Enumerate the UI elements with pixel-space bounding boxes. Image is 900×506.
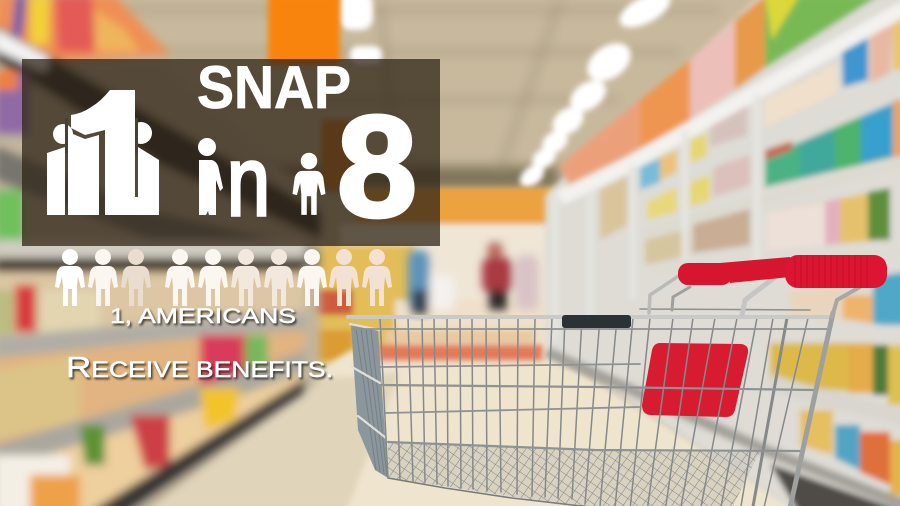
caption line 1: 1, AMERICANS — [110, 305, 296, 328]
title: SNAP: SNAP — [197, 54, 351, 121]
shopping cart — [348, 255, 887, 506]
teal row — [765, 103, 893, 187]
ceiling — [0, 0, 900, 250]
large numeral 8: 8 — [337, 86, 417, 247]
cart side panel — [350, 324, 388, 478]
caption line 2: RECEIVE BENEFITS. — [66, 352, 333, 384]
dark title panel — [22, 59, 440, 246]
row of ten person icons — [55, 249, 392, 306]
cart rim and outer frame — [348, 268, 860, 506]
lower right products — [843, 295, 873, 323]
icon: person beside 8 — [292, 153, 326, 215]
large numeral 1 with figures — [47, 90, 159, 215]
left shelves — [0, 0, 320, 506]
floor — [140, 330, 810, 506]
cart horizontal wires — [352, 329, 828, 451]
orange column and back wall — [268, 0, 555, 365]
top banner — [765, 0, 880, 68]
right shelves — [545, 0, 900, 506]
cart vertical wires — [380, 318, 808, 506]
word: in, with person as the letter i: n — [227, 126, 270, 236]
upper row of products — [765, 63, 837, 127]
ceiling lights — [339, 0, 676, 192]
word: in, with person as the letter i — [198, 126, 270, 236]
large numeral 1 with figures: 1 — [69, 57, 167, 253]
shelf edges — [560, 8, 900, 198]
red cart tag — [642, 343, 748, 417]
black rim clip — [562, 315, 631, 328]
red handle — [678, 255, 887, 288]
shoppers in the background — [408, 242, 539, 314]
cart basket floor mesh — [388, 442, 760, 506]
yellow row — [767, 190, 883, 250]
